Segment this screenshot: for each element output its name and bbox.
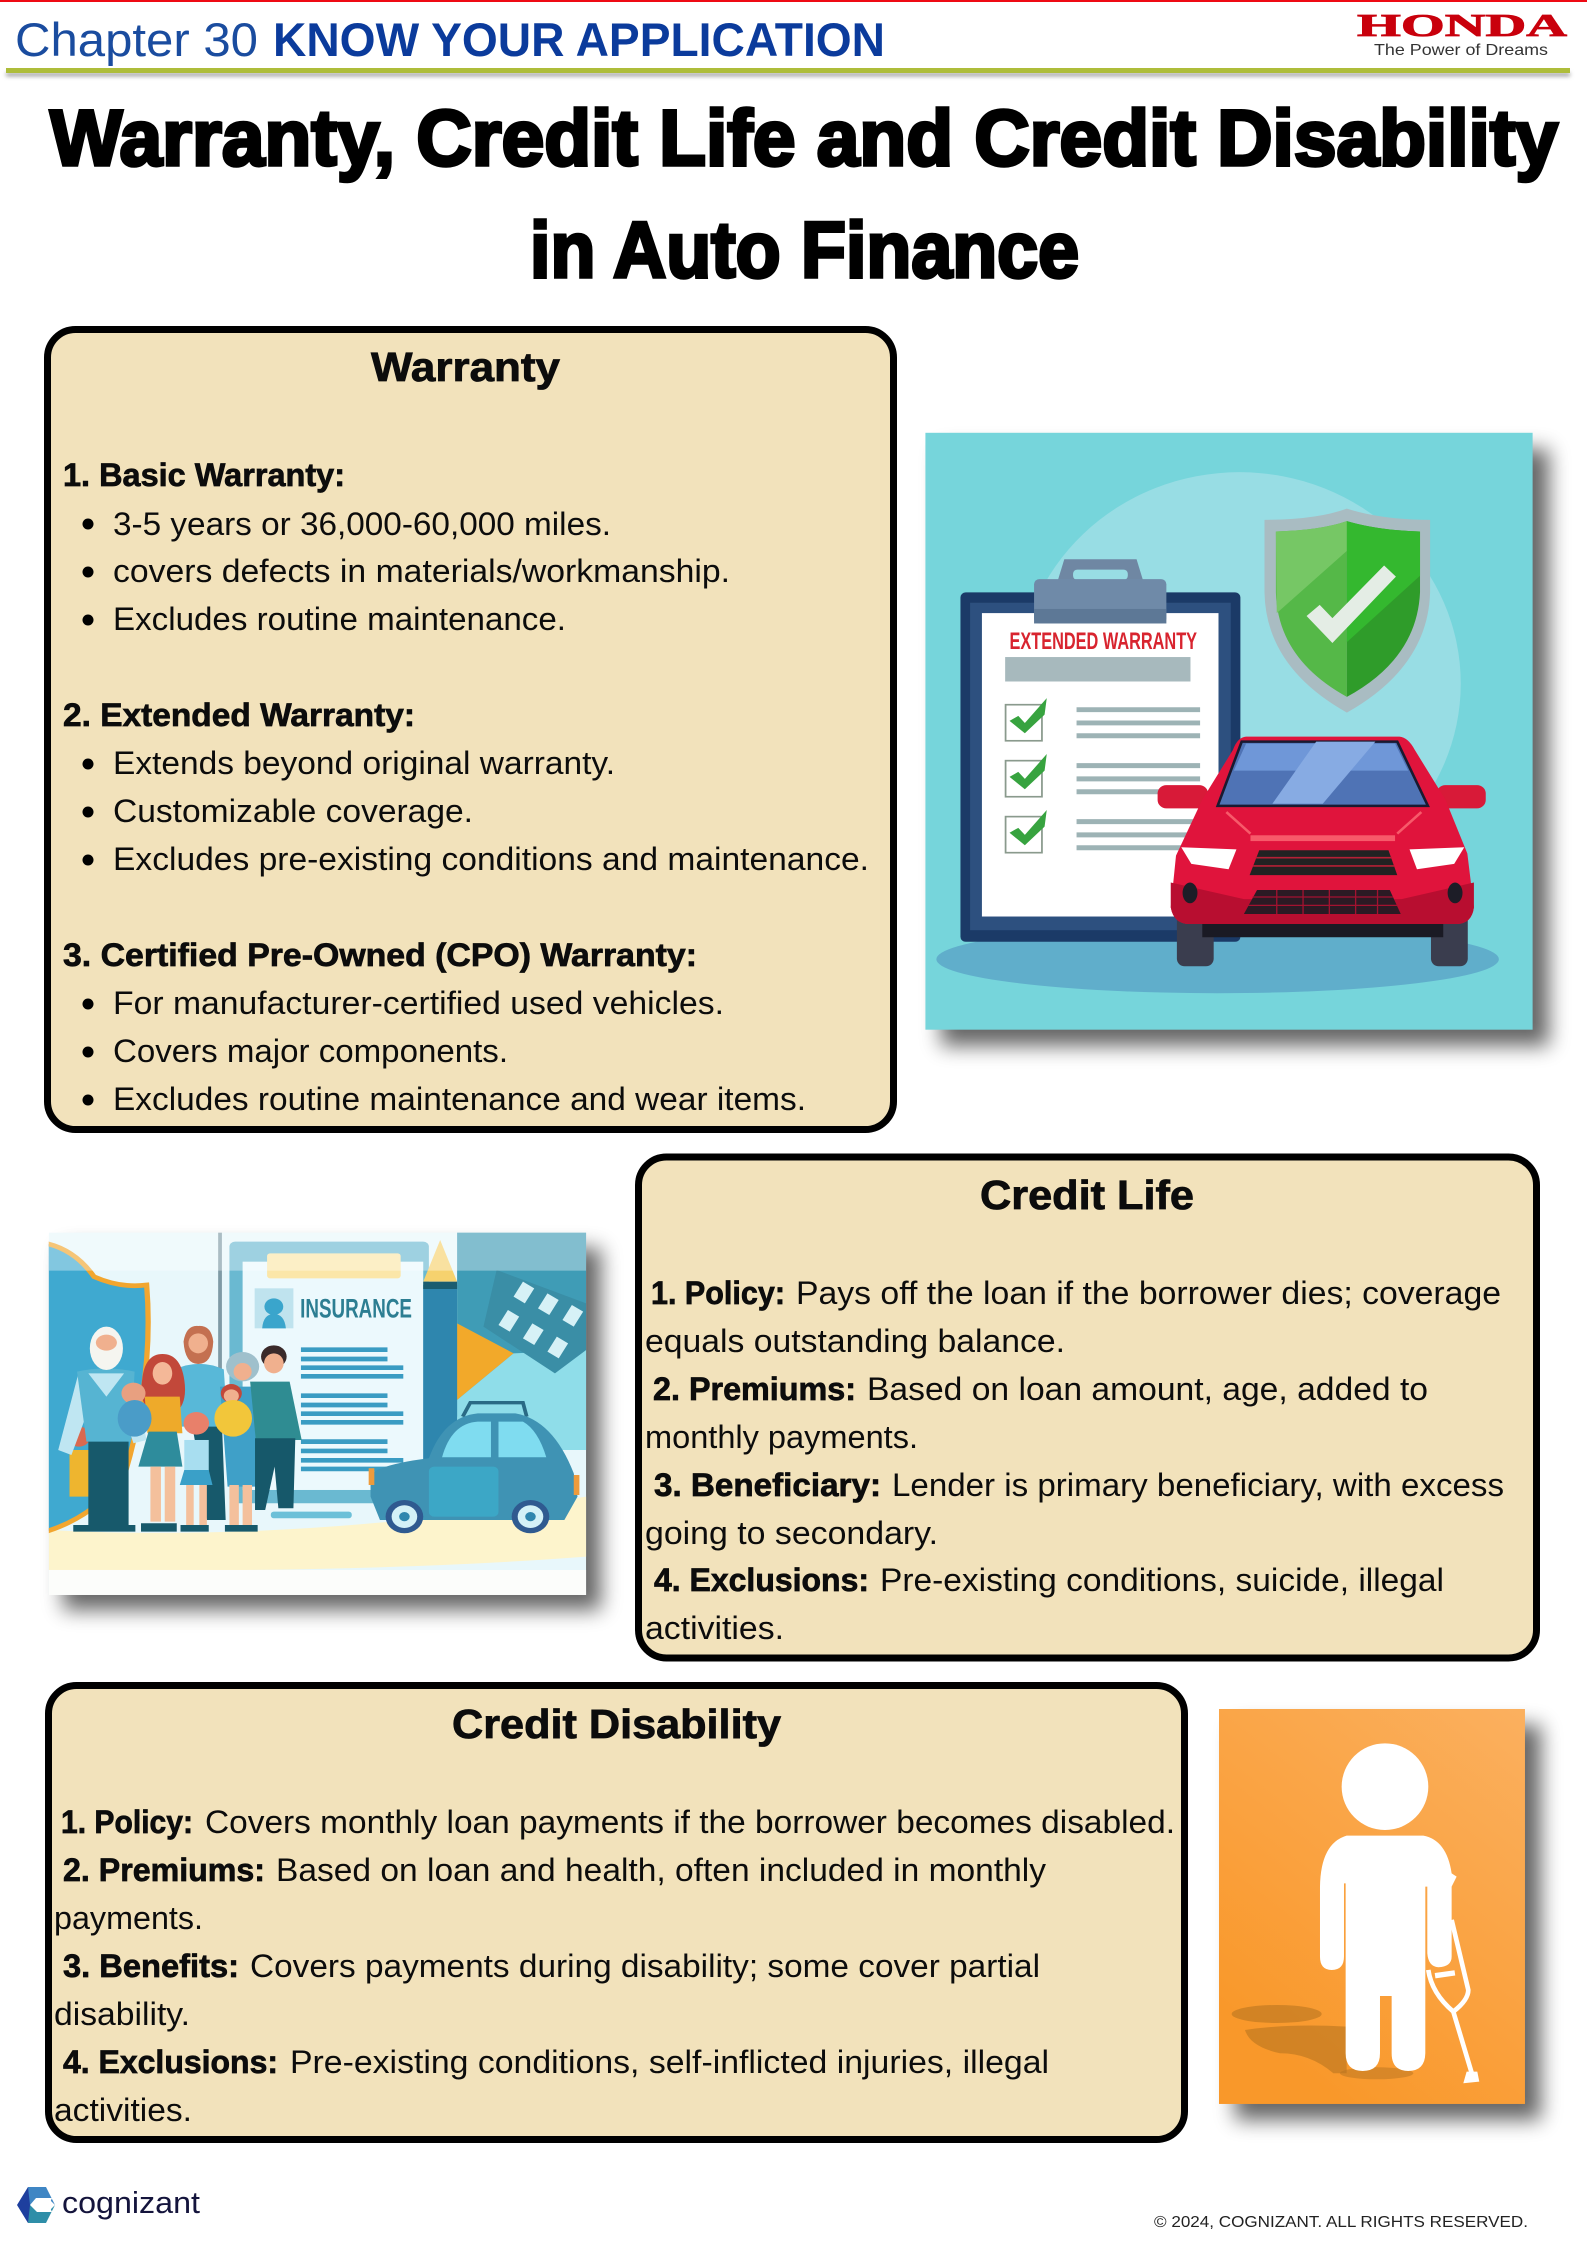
item: beneficiary: Lender is primary beneficiary, with excess [892, 1467, 1504, 1503]
item: beneficiary [645, 1467, 1504, 1551]
item: premiums: monthly payments. [645, 1419, 918, 1455]
section: certified pre-owned warranty: 3. Certified Pre-Owned (CPO) Warranty: [63, 937, 697, 973]
logo: Honda: HONDA [1357, 7, 1567, 43]
item: benefits: disability. [54, 1996, 190, 2032]
section: extended warranty: 2. Extended Warranty: [63, 697, 415, 733]
title: in Auto Finance [530, 205, 1079, 294]
logo: Honda [1357, 7, 1567, 59]
item: exclusions: Pre-existing conditions, self-inflicted injuries, illegal [290, 2044, 1049, 2080]
item: beneficiary: going to secondary. [645, 1515, 938, 1551]
panel: credit disability [48, 1686, 1184, 2140]
item: exclusions: Pre-existing conditions, suicide, illegal [880, 1562, 1444, 1598]
item: premiums: Based on loan amount, age, added to [867, 1371, 1428, 1407]
item: policy: 1. Policy: [651, 1275, 785, 1311]
item: exclusions: activities. [54, 2092, 192, 2128]
item: exclusions [645, 1562, 1444, 1646]
chapter label: KNOW YOUR APPLICATION [273, 13, 885, 66]
small car [369, 1403, 579, 1533]
section: basic warranty [63, 457, 730, 637]
chapter label [15, 13, 885, 66]
section: certified pre-owned warranty: For manufacturer-certified used vehicles. [113, 985, 724, 1021]
item: exclusions: activities. [645, 1610, 784, 1646]
section: basic warranty: Excludes routine maintenance. [113, 601, 566, 637]
image: extended warranty illustration [925, 433, 1549, 1046]
title [50, 93, 1558, 294]
item: premiums: 2. Premiums: [653, 1371, 856, 1407]
item: policy [645, 1275, 1501, 1359]
heading: warranty: Warranty [371, 344, 560, 390]
section: basic warranty: 3-5 years or 36,000-60,000 miles. [113, 506, 611, 542]
item: exclusions [54, 2044, 1049, 2128]
section: extended warranty: Customizable coverage. [113, 793, 473, 829]
logo: Cognizant [17, 2185, 200, 2223]
copyright: © 2024, COGNIZANT. ALL RIGHTS RESERVED. [1154, 2214, 1528, 2231]
item: policy: Pays off the loan if the borrower dies; coverage [796, 1275, 1501, 1311]
section: extended warranty: Excludes pre-existing conditions and maintenance. [113, 841, 869, 877]
item: premiums: Based on loan and health, often included in monthly [276, 1852, 1046, 1888]
item: policy: Covers monthly loan payments if the borrower becomes disabled. [205, 1804, 1175, 1840]
section: extended warranty: Extends beyond original warranty. [113, 745, 615, 781]
title: Warranty, Credit Life and Credit Disability [50, 93, 1558, 182]
section: basic warranty: 1. Basic Warranty: [63, 457, 345, 493]
item: exclusions: 4. Exclusions: [63, 2044, 278, 2080]
chapter label: Chapter 30 [15, 13, 258, 66]
item: benefits: Covers payments during disability; some cover partial [250, 1948, 1040, 1984]
people group [58, 1326, 352, 1532]
image: insurance family illustration [46, 1233, 601, 1610]
item: policy: equals outstanding balance. [645, 1323, 1065, 1359]
item: premiums: payments. [54, 1900, 203, 1936]
header band [0, 0, 1587, 76]
section: extended warranty [63, 697, 869, 877]
item: premiums: 2. Premiums: [63, 1852, 265, 1888]
item: premiums [54, 1852, 1046, 1936]
heading: credit life: Credit Life [980, 1172, 1194, 1218]
item: beneficiary: 3. Beneficiary: [654, 1467, 881, 1503]
heading: credit disability: Credit Disability [452, 1701, 781, 1747]
logo: Cognizant: cognizant [62, 2185, 200, 2220]
item: policy: 1. Policy: [61, 1804, 193, 1840]
image: person with crutch [1219, 1709, 1541, 2120]
item: premiums [645, 1371, 1428, 1455]
section: basic warranty: covers defects in materials/workmanship. [113, 553, 730, 589]
item: benefits: 3. Benefits: [63, 1948, 239, 1984]
item: exclusions: 4. Exclusions: [654, 1562, 869, 1598]
image: insurance family illustration: INSURANCE [300, 1294, 412, 1324]
panel: credit life [638, 1157, 1536, 1658]
section: certified pre-owned warranty: Excludes routine maintenance and wear items. [113, 1081, 806, 1117]
section: certified pre-owned warranty: Covers major components. [113, 1033, 508, 1069]
image: extended warranty illustration: EXTENDED WARRANTY [1010, 629, 1197, 655]
section: certified pre-owned warranty [63, 937, 806, 1117]
logo: Honda: The Power of Dreams [1374, 42, 1548, 59]
item: benefits [54, 1948, 1040, 2032]
panel: warranty [48, 330, 894, 1130]
